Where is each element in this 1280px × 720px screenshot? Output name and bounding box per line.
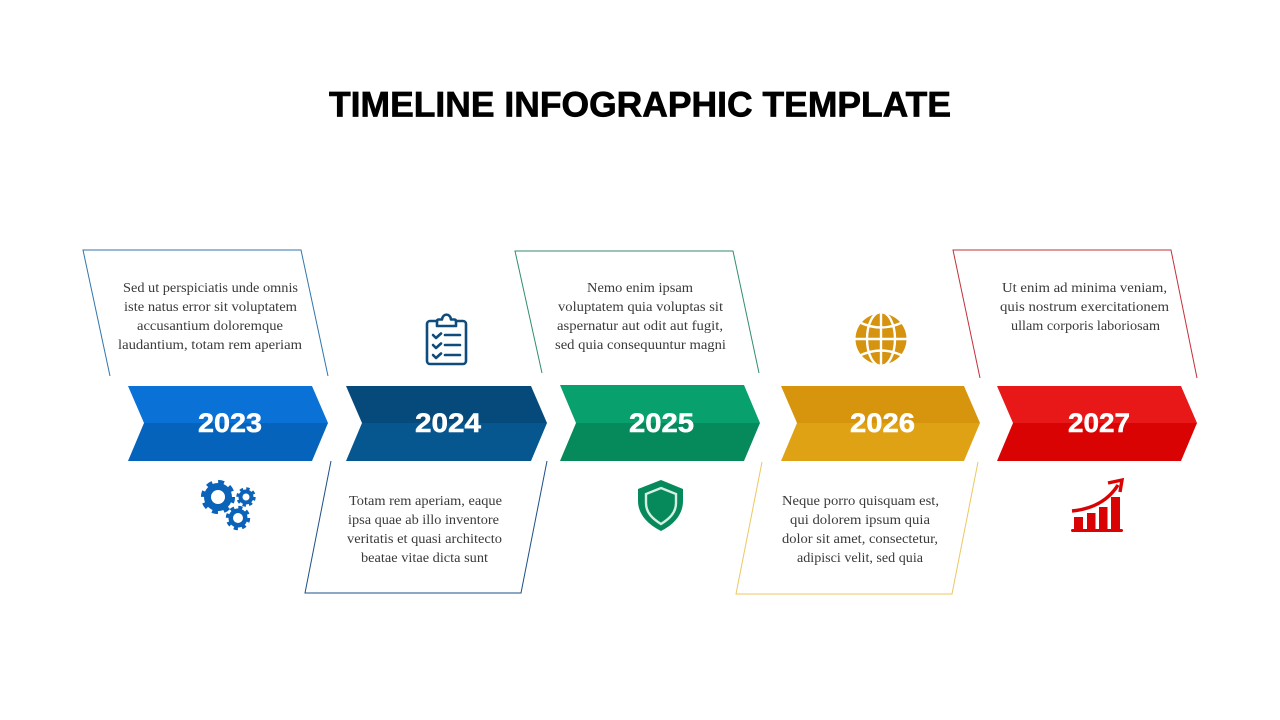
text block: 2026 description: dolor sit amet, consectetur,	[782, 532, 938, 547]
arrow: 2027	[997, 386, 1197, 461]
text block: 2024 description: veritatis et quasi architecto	[347, 532, 502, 547]
text block: 2026 description	[782, 494, 939, 566]
text block: 2024 description: beatae vitae dicta sunt	[361, 551, 488, 566]
arrow: 2023: 2023	[198, 408, 262, 438]
text block: 2024 description: ipsa quae ab illo inventore	[348, 513, 499, 528]
text block: 2023 description: laudantium, totam rem aperiam	[118, 338, 302, 353]
text block: 2025 description	[555, 281, 726, 353]
arrow: 2024	[346, 386, 547, 461]
text block: 2026 description: Neque porro quisquam est,	[782, 494, 939, 509]
icon: globe	[854, 312, 908, 366]
arrow: 2026	[781, 386, 980, 461]
panel: 2027 text box	[953, 250, 1197, 378]
text block: 2027 description	[1000, 281, 1169, 334]
icon: shield	[638, 480, 683, 531]
panel: 2023 text box	[83, 250, 328, 376]
arrow: 2024: 2024	[415, 408, 481, 438]
text block: 2026 description: adipisci velit, sed quia	[797, 551, 924, 566]
icon: growth chart	[1071, 480, 1123, 532]
text block: 2026 description: qui dolorem ipsum quia	[790, 513, 931, 528]
arrow: 2025: 2025	[629, 408, 694, 438]
arrow: 2027: 2027	[1068, 408, 1130, 438]
title: TIMELINE INFOGRAPHIC TEMPLATE	[329, 86, 951, 124]
text block: 2027 description: Ut enim ad minima veniam,	[1002, 281, 1167, 296]
text block: 2025 description: aspernatur aut odit aut fugit,	[557, 319, 723, 334]
panel: 2024 text box	[305, 461, 547, 593]
text block: 2023 description: Sed ut perspiciatis unde omnis	[123, 281, 298, 296]
panel: 2025 text box	[515, 251, 759, 373]
text block: 2023 description	[118, 281, 302, 353]
arrow: 2026: 2026	[850, 408, 915, 438]
arrow: 2023	[128, 386, 328, 461]
text block: 2027 description: ullam corporis laboriosam	[1011, 319, 1160, 334]
arrow: 2025	[560, 385, 760, 461]
text block: 2025 description: Nemo enim ipsam	[587, 281, 693, 296]
text block: 2024 description: Totam rem aperiam, eaque	[349, 494, 502, 509]
text block: 2027 description: quis nostrum exercitationem	[1000, 300, 1169, 315]
text block: 2025 description: voluptatem quia voluptas sit	[558, 300, 723, 315]
icon: clipboard checklist	[427, 315, 466, 364]
text block: 2023 description: iste natus error sit voluptatem	[124, 300, 297, 315]
text block: 2023 description: accusantium doloremque	[137, 319, 283, 334]
text block: 2025 description: sed quia consequuntur magni	[555, 338, 726, 353]
panel: 2026 text box	[736, 462, 978, 594]
icon: gears	[203, 482, 254, 529]
text block: 2024 description	[347, 494, 502, 566]
